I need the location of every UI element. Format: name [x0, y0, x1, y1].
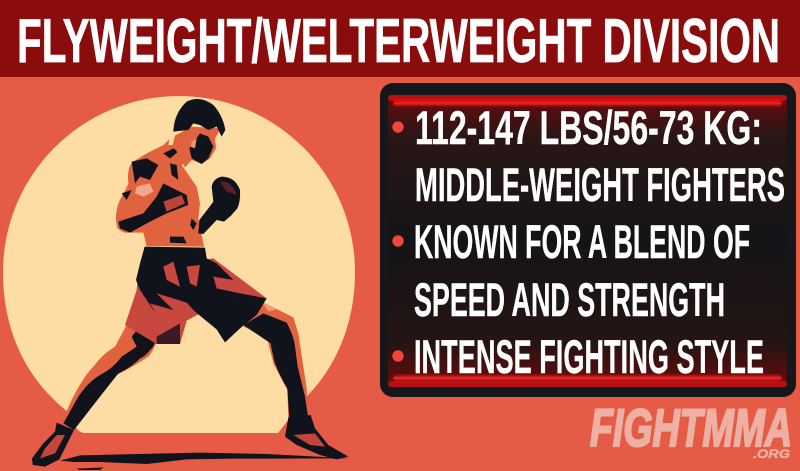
bullet [392, 350, 404, 362]
bullet [392, 235, 404, 247]
front leg [243, 302, 308, 418]
head [173, 99, 225, 167]
shorts [125, 247, 267, 344]
torso and arm [116, 127, 204, 247]
logo [590, 399, 792, 461]
info panel [380, 83, 796, 397]
bottom red line [388, 376, 787, 387]
back leg [63, 325, 159, 430]
front foot [285, 415, 348, 459]
title banner [0, 0, 800, 77]
logo suffix: .ORG [753, 449, 790, 461]
cream sun disc [3, 96, 355, 433]
bullet [392, 121, 404, 133]
ground shadow [60, 453, 350, 470]
back foot [32, 423, 74, 467]
lead glove and forearm [198, 177, 240, 234]
panel inner frame [388, 95, 787, 387]
illustration: boxer [32, 99, 350, 470]
top red line [388, 95, 787, 105]
